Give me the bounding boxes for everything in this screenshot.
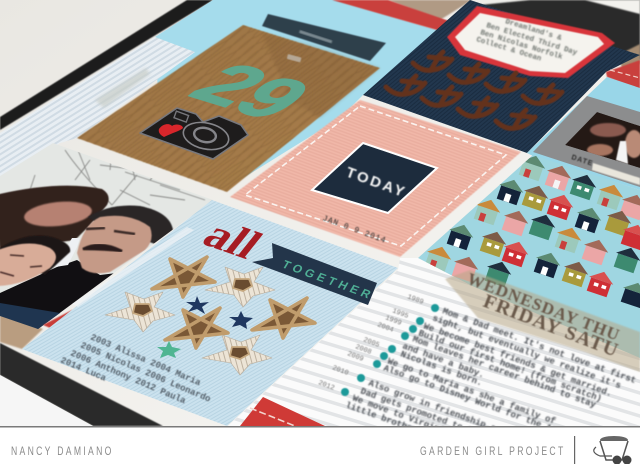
binder edge top right (470, 0, 640, 60)
together banner (252, 243, 377, 305)
man shirt (0, 260, 125, 330)
journal timeline years: 2008 (354, 343, 372, 357)
white surface lower left (0, 375, 93, 426)
anchor (486, 73, 525, 91)
journal timeline text: We move to Virginia, along the way (351, 393, 528, 464)
label text: Collect & Ocean (475, 36, 543, 64)
white collar gap (55, 238, 80, 267)
small red ribbon (43, 310, 78, 330)
names list: 2003 Alissa 2004 Maria (89, 333, 203, 388)
brand name: GARDEN GIRL PROJECT (420, 446, 566, 458)
panel: striped white journal paper (228, 258, 640, 426)
author name: NANCY DAMIANO (11, 446, 114, 458)
names list: 2014 Luca (59, 356, 108, 384)
journal timeline text: Also go to Disney World for the 1st (382, 363, 563, 437)
journal timeline years: 2010 (331, 364, 349, 378)
mustache (83, 245, 122, 251)
star (205, 267, 275, 307)
child hair (0, 236, 70, 275)
today box (312, 143, 437, 213)
star (105, 292, 175, 332)
label text: Dreamland's & (504, 18, 563, 43)
woman face (23, 199, 93, 229)
journal timeline text (346, 306, 636, 426)
panel: cyan paper (155, 0, 440, 180)
wood table strip top (388, 0, 472, 20)
anchor (449, 64, 488, 82)
slide photo (565, 112, 640, 168)
number 29: 29 (171, 52, 330, 132)
icon: camera with heart (140, 108, 248, 159)
red ribbon top (332, 0, 452, 30)
wood table strip right (620, 44, 640, 67)
navy star (229, 311, 253, 329)
panel: striped left paper (0, 37, 195, 182)
journal timeline years (317, 293, 424, 393)
navy strip under photo (0, 303, 60, 329)
table tan lower left (0, 312, 43, 349)
footer bar (0, 426, 640, 464)
man mouth (92, 253, 114, 255)
panel: family photo (0, 140, 215, 335)
red ribbon right (606, 60, 640, 90)
anchor (458, 98, 497, 116)
panel: pink card (230, 100, 521, 257)
man face (77, 216, 152, 273)
wood star frames (152, 257, 315, 348)
label text: Ben Nicolas Norfolk (479, 29, 564, 62)
today text: TODAY (344, 164, 409, 201)
together text: TOGETHER (279, 258, 377, 302)
child face (0, 243, 56, 286)
woman hair (0, 186, 109, 250)
red ribbon bottom (240, 397, 325, 428)
red octagon label (447, 6, 615, 78)
tape with printed days: WEDNESDAY THU (465, 269, 623, 345)
faint stamp on striped paper (95, 68, 150, 108)
anchor (386, 76, 425, 94)
names list: 2006 Anthony 2012 Paula (69, 349, 188, 407)
anchor (523, 85, 562, 103)
names list: 2005 Nicolas 2006 Leonardo (79, 341, 212, 405)
star (152, 257, 215, 297)
white table corner top right (585, 0, 640, 14)
journal timeline text: We become best friends & get married. (422, 321, 613, 399)
cyan strip right (527, 77, 640, 190)
journal timeline years: 1995 (391, 307, 409, 321)
label text (475, 18, 578, 64)
date text: JAN 0 9 2014 (321, 214, 387, 246)
journal timeline years: 2012 (317, 379, 335, 393)
journal timeline years: 2005 (362, 336, 380, 350)
panel: wood card (77, 25, 380, 192)
anchor (413, 52, 452, 70)
anchor (422, 87, 461, 105)
man hair (88, 205, 173, 245)
date field (592, 163, 640, 185)
icon: heart (159, 124, 183, 137)
journal timeline text: We go to Maria as she a family of (386, 356, 557, 427)
journal timeline text: Mom & Dad meet. It's not love at first (441, 306, 637, 386)
journal timeline years: 1999 (384, 314, 402, 328)
all title: all (194, 212, 272, 267)
wood anchors (386, 52, 562, 128)
divider (574, 436, 575, 464)
panel: navy paper (363, 0, 640, 153)
icon: bucket logo (594, 436, 632, 464)
wrapped stars (105, 267, 275, 375)
stitching (245, 106, 506, 246)
journal timeline years: 2009 (346, 350, 364, 364)
journal timeline text: Nicolas is born. (399, 349, 484, 388)
teal enamel dots (341, 304, 439, 396)
tape with printed days (445, 269, 640, 372)
journal timeline years: 2004 (376, 321, 394, 335)
child features (0, 255, 42, 276)
journal timeline text: Mom leaves her career behind to stay (411, 334, 598, 411)
panel: all together card (22, 200, 398, 426)
DATE label: DATE (570, 154, 594, 168)
panel: dark tag behind wood (262, 14, 386, 61)
journal timeline text: Also grow in friendship and love (367, 378, 533, 447)
panel: grey slide mount (533, 96, 640, 187)
journal timeline text: Build our first home! (from scratch) (417, 328, 603, 404)
binder edge top (0, 0, 213, 130)
small tag on wood (287, 54, 302, 62)
journal timeline text: sight, but eventually we realize it's (431, 313, 622, 391)
journal timeline text: Dad gets promoted to Norfolk (359, 386, 505, 448)
label text: Ben Elected Third Day (485, 22, 578, 58)
journal timeline text: little brother comes home (344, 400, 474, 456)
tape with printed days: FRIDAY SATU (480, 290, 622, 362)
man eyes (86, 228, 135, 234)
star (202, 335, 272, 375)
journal timeline text: and have a baby. (401, 341, 486, 380)
navy star (186, 296, 209, 314)
bare tree (30, 150, 205, 205)
journal timeline years: 1989 (406, 293, 424, 307)
anchor (496, 110, 535, 128)
binder edge lower left (0, 343, 163, 426)
star (165, 308, 228, 348)
star (252, 298, 315, 338)
green star (157, 341, 181, 358)
panel: houses paper (418, 152, 640, 365)
